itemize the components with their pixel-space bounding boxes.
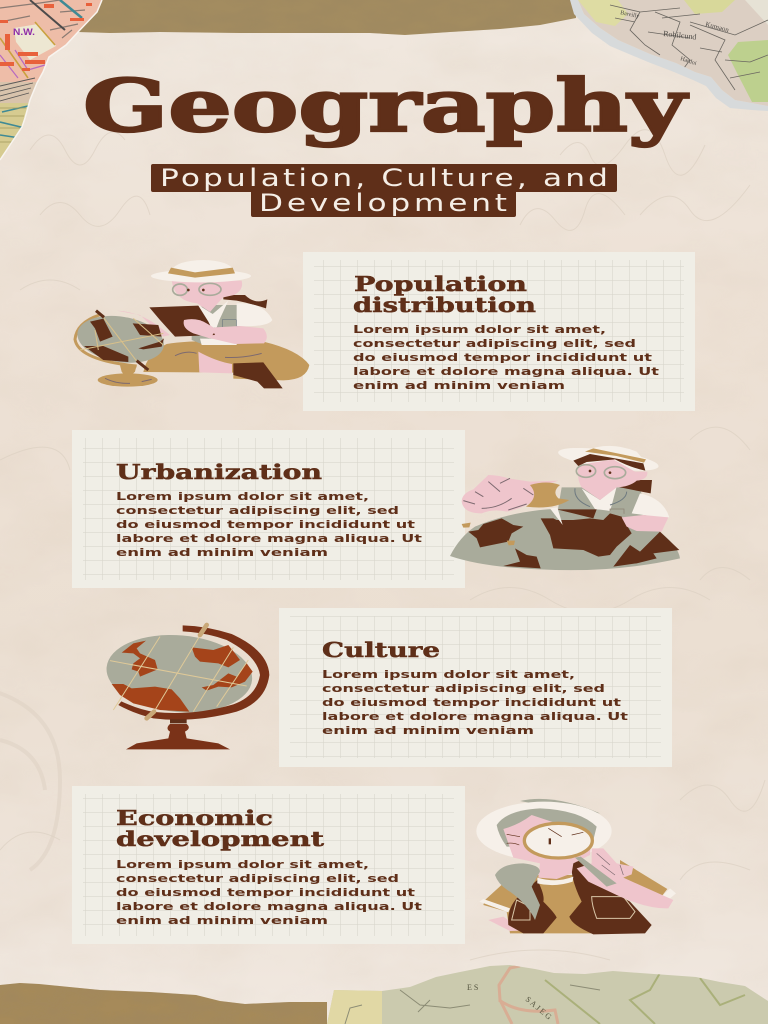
hand: [184, 319, 217, 338]
hair braid: [495, 863, 540, 920]
heading: economic development: [116, 806, 325, 851]
map label: N.W.: [13, 27, 35, 37]
heading: economic development: Economic: [116, 806, 273, 830]
text block: urbanization: labore et dolore magna aliqua. Ut: [116, 532, 422, 545]
text block: population distribution: [353, 323, 659, 392]
torso: [192, 305, 240, 344]
text block: population distribution: Lorem ipsum dolor sit amet,: [353, 323, 606, 336]
heading: population distribution: Population: [354, 272, 527, 296]
panel: economic development: [72, 786, 465, 944]
magnifying glass: [524, 823, 592, 858]
trousers: [143, 341, 309, 380]
face: [172, 281, 242, 312]
heading: population distribution: [353, 272, 536, 317]
text block: urbanization: enim ad minim veniam: [116, 546, 328, 559]
meridian ring: [118, 625, 269, 720]
text block: urbanization: Lorem ipsum dolor sit amet,: [116, 490, 369, 503]
meridians: [110, 630, 248, 718]
panel: population distribution: [303, 252, 695, 411]
continents: [468, 518, 523, 547]
text block: culture: [322, 668, 628, 737]
arm: [207, 326, 267, 344]
heading: urbanization: Urbanization: [116, 460, 322, 484]
title: Geography: [83, 63, 689, 148]
arm and hand: [577, 848, 673, 908]
heading: population distribution: distribution: [353, 293, 536, 317]
torso: [557, 487, 647, 517]
stand: [126, 724, 230, 749]
subtitle: [151, 164, 617, 217]
text block: population distribution: enim ad minim veniam: [353, 379, 565, 392]
panel: urbanization: [72, 430, 465, 588]
text block: culture: consectetur adipiscing elit, sed: [322, 682, 605, 695]
map dome: [450, 508, 680, 570]
illustration: explorer placing pin on map: [450, 443, 680, 570]
face: [578, 459, 647, 500]
torn map: top right: Kumaon: [704, 20, 730, 34]
text block: economic development: [116, 858, 422, 927]
hand and pin: [462, 475, 558, 513]
torn map: bottom right: S A J E G: [524, 995, 554, 1022]
torn map: top right: Hardoi: [679, 56, 697, 67]
continents: [122, 641, 158, 677]
hair: [223, 295, 267, 308]
text block: culture: do eiusmod tempor incididunt ut: [322, 696, 621, 709]
text block: economic development: Lorem ipsum dolor sit amet,: [116, 858, 369, 871]
hair top: [497, 808, 597, 847]
torn map: bottom right: [325, 960, 768, 1024]
hair back: [617, 480, 652, 493]
torn map: top right: Bareilly: [620, 10, 640, 20]
torn map: top left: [0, 0, 102, 158]
illustration: explorer with magnifying glass: [476, 799, 676, 934]
illustration: desk globe: [103, 625, 269, 749]
heading: culture: Culture: [322, 638, 440, 662]
text block: urbanization: [116, 490, 422, 559]
text block: population distribution: consectetur adipiscing elit, sed: [353, 337, 636, 350]
jacket: [483, 875, 593, 933]
torn map: top right: [570, 0, 768, 111]
tablet: [149, 306, 215, 337]
map labels: Rohilcund: [663, 29, 697, 41]
subtitle: Population, Culture, and: [160, 164, 608, 192]
subtitle: Development: [259, 189, 507, 217]
hair: [573, 454, 645, 471]
heading: economic development: development: [116, 827, 325, 851]
text block: urbanization: do eiusmod tempor incididunt ut: [116, 518, 415, 531]
hat: [151, 270, 251, 282]
map labels: E S: [467, 983, 478, 992]
face and neck: [503, 815, 592, 879]
globe: [75, 315, 137, 366]
hat brim: [557, 443, 660, 475]
text block: culture: Lorem ipsum dolor sit amet,: [322, 668, 575, 681]
text block: population distribution: labore et dolore magna aliqua. Ut: [353, 365, 659, 378]
text block: culture: enim ad minim veniam: [322, 724, 534, 737]
hat: [520, 799, 600, 813]
right hand: [622, 515, 668, 532]
text block: culture: labore et dolore magna aliqua. Ut: [322, 710, 628, 723]
text block: economic development: enim ad minim veniam: [116, 914, 328, 927]
torn kraft paper: top: [78, 0, 576, 35]
text block: economic development: consectetur adipiscing elit, sed: [116, 872, 399, 885]
vest: [508, 880, 557, 933]
text block: economic development: labore et dolore magna aliqua. Ut: [116, 900, 422, 913]
text block: population distribution: do eiusmod tempor incididunt ut: [353, 351, 652, 364]
globe sphere: [103, 629, 255, 718]
torn kraft paper: bottom left: [0, 983, 327, 1024]
panel: culture: [279, 608, 672, 767]
text block: urbanization: consectetur adipiscing elit, sed: [116, 504, 399, 517]
text block: economic development: do eiusmod tempor incididunt ut: [116, 886, 415, 899]
illustration: explorer with tablet and globe: [74, 260, 309, 388]
